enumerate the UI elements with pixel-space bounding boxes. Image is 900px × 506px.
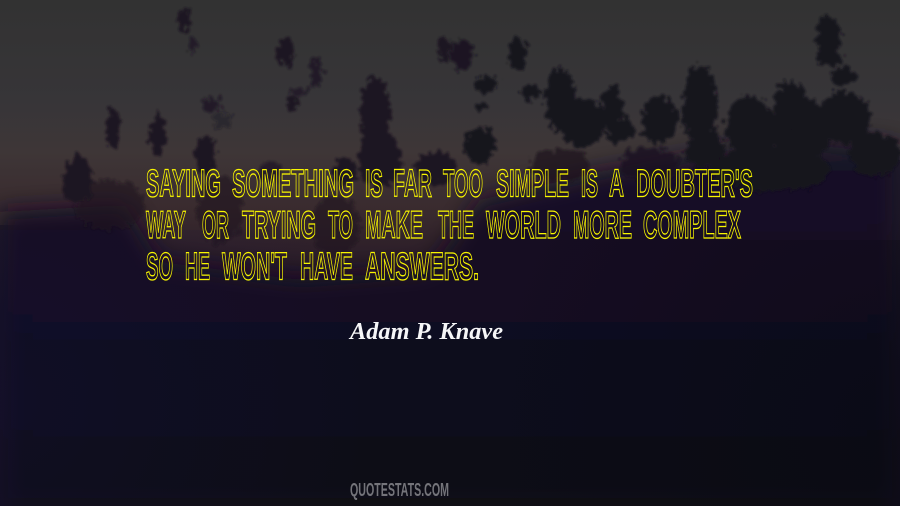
line 1	[146, 162, 753, 206]
line 1: IS	[365, 162, 383, 206]
author: Adam P. Knave	[348, 319, 503, 345]
background: plant silhouettes left	[63, 9, 456, 255]
background: lower field shading left	[0, 230, 380, 506]
quote text	[146, 162, 753, 288]
background: ground right edge	[874, 160, 900, 506]
line 1: SIMPLE	[496, 162, 569, 206]
line 1: A	[609, 162, 624, 206]
line 3: SO	[146, 246, 173, 288]
line 3	[146, 246, 479, 288]
line 2: WORLD	[486, 204, 561, 247]
line 2: THE	[438, 204, 474, 247]
line 1: FAR	[393, 162, 432, 206]
background: ground left edge	[0, 225, 26, 506]
watermark: QUOTESTATS.COM	[350, 479, 449, 500]
line 2: MAKE	[365, 204, 423, 247]
line 2: TRYING	[242, 204, 316, 247]
line 2: WAY	[146, 204, 186, 247]
line 2: MORE	[573, 204, 632, 247]
line 3: HE	[185, 246, 210, 288]
line 2: COMPLEX	[643, 204, 741, 247]
line 3: HAVE	[300, 246, 353, 288]
line 1: SOMETHING	[232, 162, 354, 206]
line 3: ANSWERS.	[365, 246, 479, 288]
line 2	[146, 204, 741, 247]
line 1: SAYING	[146, 162, 221, 206]
line 3: WON'T	[222, 246, 287, 288]
line 2: TO	[328, 204, 353, 247]
background: plant silhouettes right	[450, 16, 900, 192]
line 2: OR	[202, 204, 229, 247]
background: ground silhouette	[0, 135, 900, 506]
background: lower field shading right	[470, 240, 900, 506]
line 1: IS	[581, 162, 598, 206]
line 1: TOO	[443, 162, 483, 206]
line 1: DOUBTER'S	[636, 162, 753, 206]
